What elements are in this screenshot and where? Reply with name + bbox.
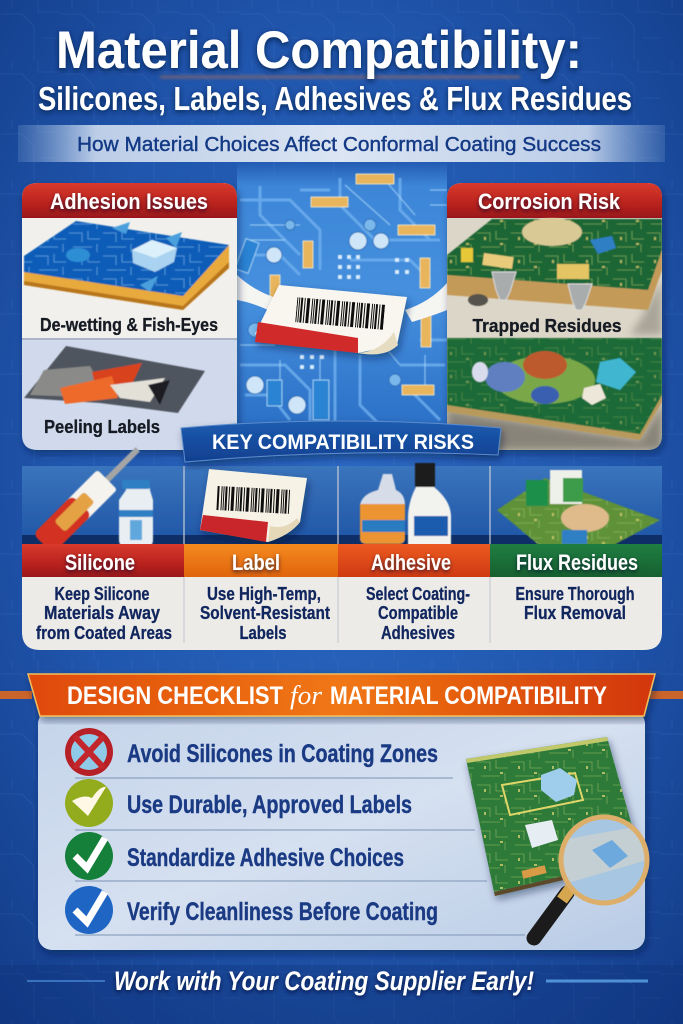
description: Keep Silicone	[54, 584, 150, 604]
label: Adhesive	[371, 550, 451, 575]
checklist item: adhesive: Standardize Adhesive Choices	[127, 844, 404, 872]
description	[516, 584, 634, 623]
banner heading: DESIGN CHECKLIST	[67, 682, 283, 710]
panel header	[22, 183, 237, 218]
icon: green board with residue	[447, 218, 662, 310]
card: label	[184, 469, 338, 643]
main heading: Material Compatibility:	[56, 21, 582, 80]
subtitle band: How Material Choices Affect Conformal Coating Success	[77, 134, 601, 156]
banner: key compatibility risks	[181, 421, 501, 462]
panel: corrosion risk	[447, 183, 662, 450]
icon: circuit board with magnifier	[466, 737, 647, 938]
panel: key compatibility risks cards	[22, 439, 662, 650]
caption: De-wetting & Fish-Eyes	[40, 315, 218, 335]
card: flux residues	[490, 470, 662, 623]
checklist item: adhesive	[65, 832, 404, 880]
checklist item: labels	[65, 779, 412, 827]
subtitle band	[18, 125, 665, 162]
description: Flux Removal	[524, 603, 626, 623]
card: silicone	[22, 439, 184, 643]
panel header	[447, 183, 662, 218]
checklist panel	[38, 710, 645, 950]
icon: barcode label	[200, 469, 307, 542]
checklist item: avoid silicones	[65, 728, 438, 776]
caption: Peeling Labels	[44, 417, 160, 437]
icon: adhesive bottles	[360, 463, 451, 546]
description: Labels	[240, 623, 286, 643]
barcode label	[255, 285, 407, 354]
icon: corroded board	[447, 338, 662, 440]
checklist item: cleanliness: Verify Cleanliness Before Coating	[127, 898, 438, 926]
speech tails	[237, 275, 282, 310]
banner heading: for	[290, 681, 323, 710]
panel: adhesion issues	[22, 183, 237, 450]
magnifier	[534, 817, 647, 938]
checklist item: avoid silicones: Avoid Silicones in Coating Zones	[127, 740, 438, 768]
description: from Coated Areas	[36, 623, 172, 643]
card: adhesive	[338, 463, 490, 643]
icon: blue coated board	[24, 221, 229, 310]
banner heading: MATERIAL COMPATIBILITY	[330, 682, 607, 710]
icon: lime check	[65, 779, 113, 827]
label: Flux Residues	[516, 550, 638, 575]
side stripes	[0, 691, 683, 699]
icon: peeling label pouch	[24, 346, 205, 413]
footer callout: Work with Your Coating Supplier Early!	[114, 966, 534, 996]
description: Materials Away	[44, 603, 160, 623]
description: Select Coating-	[366, 584, 470, 604]
icon: flux board	[497, 470, 660, 546]
description: Solvent-Resistant	[200, 603, 330, 623]
panel: design checklist	[0, 674, 683, 950]
icon: green check	[65, 832, 113, 880]
dividers	[75, 778, 525, 935]
description: Use High-Temp,	[207, 584, 321, 604]
icon: red cross	[65, 728, 113, 776]
description: Compatible	[378, 603, 458, 623]
banner: key compatibility risks: KEY COMPATIBILITY RISKS	[212, 431, 474, 454]
caption: Trapped Residues	[472, 316, 622, 336]
icon: silicone tube and bottle	[33, 439, 153, 554]
label: Silicone	[65, 550, 135, 575]
banner heading	[28, 674, 655, 716]
description	[36, 584, 172, 643]
description: Ensure Thorough	[516, 584, 634, 604]
panel heading: Adhesion Issues	[50, 189, 208, 214]
panel heading: Corrosion Risk	[478, 189, 621, 214]
checklist item: labels: Use Durable, Approved Labels	[127, 791, 412, 819]
title	[38, 21, 632, 117]
description	[366, 584, 470, 643]
center circuit board illustration	[235, 162, 447, 432]
description	[200, 584, 330, 643]
icon: blue check	[65, 886, 113, 934]
description: Adhesives	[381, 623, 455, 643]
checklist item: cleanliness	[65, 886, 438, 934]
resistors	[270, 174, 435, 395]
label: Label	[232, 550, 280, 575]
